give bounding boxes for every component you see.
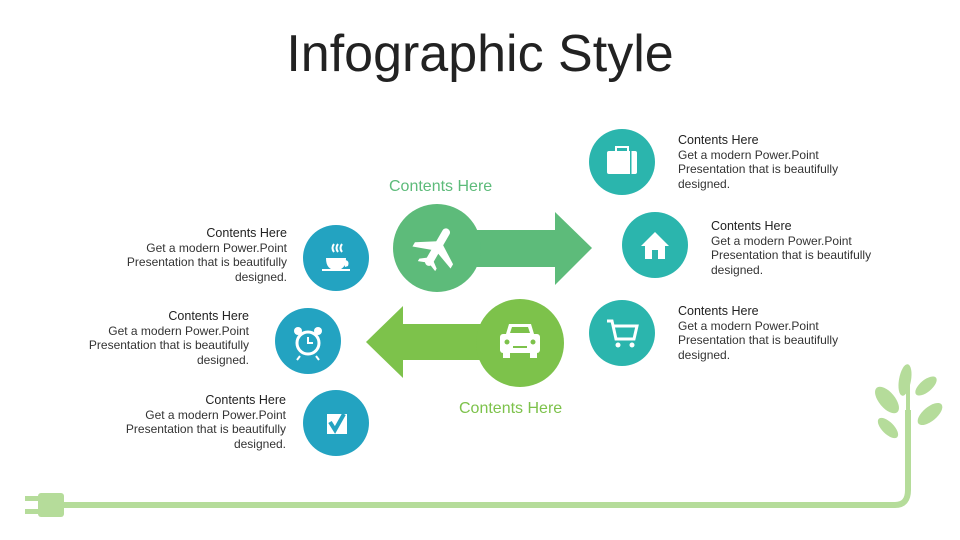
icon: checkbox (303, 390, 369, 456)
icon: plant (871, 363, 946, 465)
text block: right 2: Get a modern Power.Point (711, 234, 852, 248)
arrow: right with plane (393, 204, 592, 292)
text block: right 2: Presentation that is beautifully (711, 248, 871, 262)
text block: right 2: Contents Here (711, 219, 792, 233)
label: top green: Contents Here (389, 178, 492, 195)
icon: coffee (303, 225, 369, 291)
text block: right 1: designed. (678, 177, 730, 191)
text block: left 1: designed. (235, 270, 287, 284)
icon: alarm clock (275, 308, 341, 374)
text block: right 1 (678, 133, 838, 191)
text block: right 1: Contents Here (678, 133, 759, 147)
text block: left 2: designed. (197, 353, 249, 367)
text block: left 1: Presentation that is beautifully (127, 255, 287, 269)
cable with plug (25, 410, 908, 517)
text block: left 2: Presentation that is beautifully (89, 338, 249, 352)
icon: house (622, 212, 688, 278)
text block: right 2 (711, 219, 872, 277)
text block: left 1: Get a modern Power.Point (146, 241, 287, 255)
text block: left 3: Presentation that is beautifully (126, 422, 286, 436)
text block: right 3: Get a modern Power.Point (678, 319, 819, 333)
text block: right 1: Presentation that is beautifully (678, 162, 838, 176)
text block: right 3: Contents Here (678, 304, 759, 318)
text block: left 3: Get a modern Power.Point (145, 408, 286, 422)
text block: right 1: Get a modern Power.Point (678, 148, 819, 162)
text block: left 3: designed. (234, 437, 286, 451)
text block: right 2: designed. (711, 263, 763, 277)
title: Infographic Style (286, 25, 674, 83)
label: bottom green: Contents Here (459, 400, 562, 417)
text block: left 3: Contents Here (205, 393, 286, 407)
text block: left 2: Contents Here (168, 309, 249, 323)
text block: left 2 (89, 309, 249, 367)
icon: cart (589, 300, 655, 366)
text block: left 3 (126, 393, 286, 451)
text block: right 3: designed. (678, 348, 730, 362)
text block: left 1: Contents Here (206, 226, 287, 240)
arrow: left with car (366, 299, 564, 387)
text block: right 3: Presentation that is beautifully (678, 333, 838, 347)
icon: briefcase (589, 129, 655, 195)
text block: left 1 (127, 226, 287, 284)
text block: left 2: Get a modern Power.Point (108, 324, 249, 338)
text block: right 3 (678, 304, 838, 362)
